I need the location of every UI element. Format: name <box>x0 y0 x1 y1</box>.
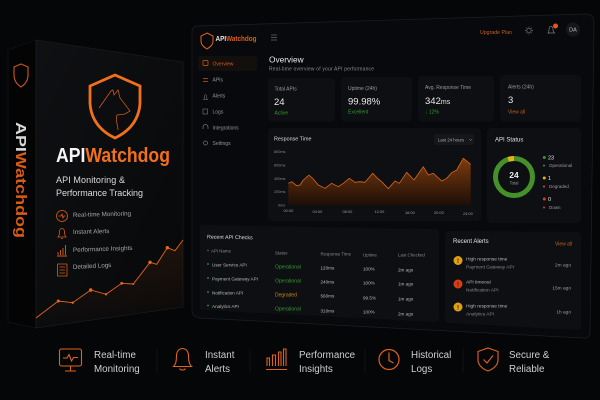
alert: payment gateway <box>454 256 571 270</box>
row: notification: Degraded <box>275 292 297 298</box>
area chart <box>288 158 471 205</box>
feature: instant alerts <box>174 348 235 375</box>
stat card: uptime: Uptime (24h) <box>348 86 377 92</box>
line chart on box <box>36 240 183 328</box>
alert: analytics: ! <box>457 306 459 312</box>
chart title: Response Time <box>274 136 311 142</box>
nav items: Settings <box>212 141 231 147</box>
box spine <box>8 40 36 328</box>
panel: recent alerts <box>445 231 581 330</box>
y axis labels: 800ms <box>274 150 285 154</box>
alert: notification timeout: Notification API <box>466 288 499 294</box>
alert: analytics: Analytics API <box>466 312 494 318</box>
row: analytics <box>207 304 414 316</box>
x axis labels: 16:00 <box>405 210 416 215</box>
row: analytics: Operational <box>275 306 301 312</box>
feature: instant alerts: Alerts <box>205 364 230 375</box>
y axis labels <box>274 150 285 208</box>
row: user service: 100% <box>363 266 375 272</box>
icon: log <box>58 264 67 276</box>
status legend: 23 <box>548 156 554 162</box>
row: analytics: 310ms <box>320 308 335 314</box>
feature: performance insights: Performance <box>299 350 356 361</box>
tagline: Performance Tracking <box>56 188 143 198</box>
row: user service: 120ms <box>320 266 335 270</box>
spine product name: API Watchdog <box>12 122 28 238</box>
row: notification: 99.5% <box>363 296 376 300</box>
y axis labels: 200ms <box>274 190 285 194</box>
icon: bars <box>57 245 67 256</box>
row: user service: Operational <box>275 264 301 270</box>
row: payment gateway: Operational <box>275 278 301 284</box>
stat card: total APIs <box>268 78 335 122</box>
range dropdown <box>434 134 474 145</box>
logo text: APIWatchdog <box>216 34 256 43</box>
feature text: Real-time Monitoring <box>73 210 132 219</box>
stat card: average response time: 342ms <box>425 96 451 107</box>
alert: notification timeout: API timeout <box>466 280 491 286</box>
panel: API status <box>487 128 581 223</box>
tagline: API Monitoring & <box>56 175 125 185</box>
row: payment gateway <box>207 276 414 286</box>
stat card: total APIs: 24 <box>274 97 285 108</box>
dashboard window <box>192 14 594 338</box>
table header: Uptime <box>363 252 377 258</box>
feature text: Detailed Logs <box>73 262 112 271</box>
x axis labels <box>284 208 474 216</box>
alert: analytics <box>454 302 571 318</box>
row: payment gateway: 240ms <box>320 280 335 284</box>
row: analytics: 100% <box>363 310 375 314</box>
row: user service: User Service API <box>212 262 247 268</box>
header bar <box>201 22 580 49</box>
x axis labels: 00:00 <box>284 208 294 213</box>
feature: historical logs: Historical <box>411 350 451 361</box>
stat card: uptime: 99.98% <box>348 96 381 108</box>
stat card: alerts: Alerts (24h) <box>508 84 534 90</box>
stat card: uptime: Excellent <box>348 110 369 116</box>
feature: secure and reliable: Reliable <box>509 364 545 375</box>
table header: Status <box>275 250 288 256</box>
x axis labels: 20:00 <box>434 210 445 215</box>
overview heading: Real-time overview of your API performance <box>269 66 374 72</box>
nav items: APIs <box>212 78 224 84</box>
stat card: total APIs: Active <box>274 110 288 116</box>
active nav item: Overview <box>212 62 234 68</box>
feature: real-time monitoring: Real-time <box>94 350 136 361</box>
tagline <box>56 175 143 198</box>
x axis labels: 12:00 <box>374 209 385 214</box>
feature: historical logs <box>379 350 451 375</box>
y axis labels: 600ms <box>274 164 285 168</box>
alerts title: Recent Alerts <box>453 239 489 245</box>
avatar: DA <box>569 28 577 34</box>
alert: notification timeout: 15m ago <box>552 286 571 292</box>
alert: notification timeout <box>454 280 571 294</box>
alert: notification timeout: ! <box>457 282 459 288</box>
row: payment gateway: 1m ago <box>398 282 414 286</box>
feature: secure and reliable <box>478 348 550 375</box>
row: payment gateway: Payment Gateway API <box>212 276 258 282</box>
row: user service <box>207 262 414 272</box>
row: payment gateway: 100% <box>363 280 375 286</box>
status legend: Down <box>549 205 561 210</box>
stat card: average response time: Avg. Response Time <box>425 85 471 91</box>
icon: sun <box>525 26 533 34</box>
row: notification <box>207 290 414 302</box>
alert: analytics: 1h ago <box>556 310 571 316</box>
row: analytics: Analytics API <box>212 304 239 309</box>
upgrade plan: Upgrade Plan <box>480 30 512 36</box>
icon: logo shield <box>201 33 213 49</box>
alert: payment gateway: ! <box>457 259 459 265</box>
status legend: 1 <box>548 176 551 182</box>
view all link: View all <box>555 242 572 248</box>
alert: payment gateway: Payment Gateway API <box>466 264 514 270</box>
nav items: Integrations <box>212 126 239 132</box>
row: notification: 560ms <box>320 294 335 298</box>
icon: bell <box>58 228 66 238</box>
stat card: alerts <box>500 75 581 122</box>
panel: recent API checks <box>200 225 439 322</box>
icon: shield with dog <box>90 75 140 138</box>
status legend: Operational <box>549 163 572 168</box>
stat card: total APIs: Total APIs <box>274 86 297 92</box>
row: notification: 1m ago <box>398 296 414 302</box>
feature: real-time monitoring <box>60 349 140 375</box>
overview heading: Overview <box>269 54 305 64</box>
feature text: Performance Insights <box>73 245 133 254</box>
x axis labels: 04:00 <box>312 209 323 214</box>
donut chart <box>496 158 532 196</box>
table header: Last Checked <box>398 252 425 258</box>
table title: Recent API Checks <box>207 235 253 241</box>
feature: real-time monitoring: Monitoring <box>94 364 140 375</box>
panel: response time chart <box>268 128 481 221</box>
product box <box>8 40 183 328</box>
feature: historical logs: Logs <box>411 364 432 375</box>
donut chart: 24 <box>509 170 519 180</box>
icon: notification bell <box>548 24 558 33</box>
donut chart: Total <box>510 180 518 186</box>
icon: spine shield <box>14 64 28 87</box>
status legend: 0 <box>548 197 551 203</box>
feature: instant alerts: Instant <box>205 350 235 361</box>
product name: APIWatchdog <box>56 145 170 167</box>
box front face <box>36 40 183 328</box>
avatar <box>566 22 580 36</box>
icon: menu <box>271 35 277 40</box>
feature: secure and reliable: Secure & <box>509 350 550 361</box>
row: notification: Notification API <box>212 290 243 296</box>
sidebar <box>198 56 257 147</box>
nav items: Logs <box>212 110 224 116</box>
feature text <box>73 210 133 271</box>
feature list <box>56 210 133 276</box>
table header: API Name <box>211 248 232 254</box>
table rows <box>207 262 414 316</box>
nav items <box>203 78 239 147</box>
icon: monitoring <box>56 210 68 222</box>
feature: performance insights: Insights <box>299 364 333 375</box>
alert: analytics: High response time <box>466 304 508 310</box>
stat card: average response time: ↓ 12% <box>425 110 439 116</box>
stat card: uptime <box>341 77 412 122</box>
table header <box>207 248 425 258</box>
x axis labels: 24:00 <box>463 211 474 216</box>
alert: payment gateway: High response time <box>466 256 508 262</box>
status legend: Degraded <box>549 184 569 189</box>
stat card: average response time <box>418 76 494 122</box>
stat card: alerts: 3 <box>508 95 513 106</box>
y axis labels: 400ms <box>274 177 285 181</box>
alert: payment gateway: 2m ago <box>555 262 571 268</box>
table header: Response Time <box>320 252 352 256</box>
feature text: Instant Alerts <box>73 228 109 236</box>
status legend <box>543 156 572 210</box>
bottom feature strip <box>60 348 550 375</box>
y axis labels: 0ms <box>278 204 285 208</box>
overview heading <box>269 54 374 72</box>
nav items: Alerts <box>212 94 226 100</box>
row: analytics: 2m ago <box>398 312 414 316</box>
range dropdown: Last 24 hours <box>438 138 464 142</box>
feature: performance insights <box>266 349 356 375</box>
stat card: alerts: View all <box>508 110 525 116</box>
panel title: API Status <box>495 138 523 144</box>
x axis labels: 08:00 <box>342 209 353 214</box>
row: user service: 2m ago <box>398 268 414 272</box>
